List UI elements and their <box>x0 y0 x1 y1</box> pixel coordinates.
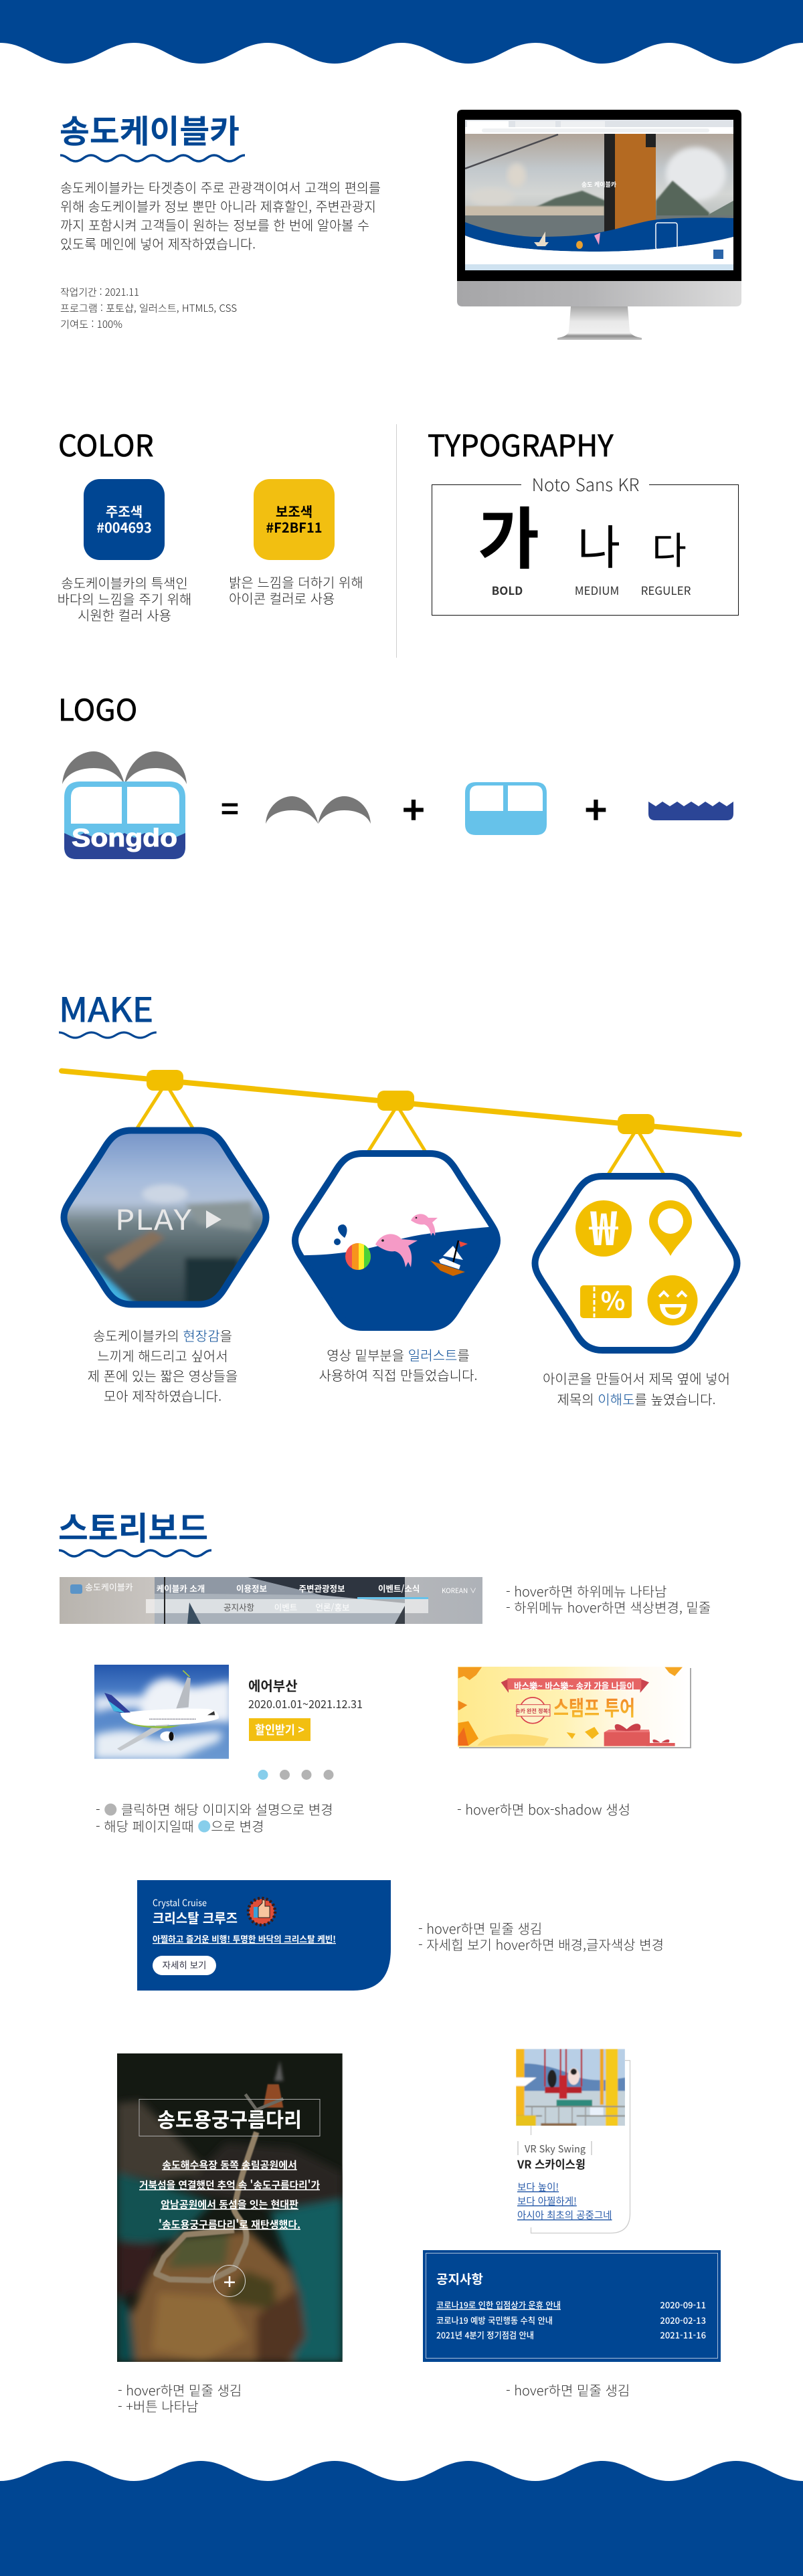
storyboard: VR swing card <box>516 2049 630 2233</box>
storyboard: event slide <box>94 1665 363 1780</box>
note: sky bridge <box>118 2380 242 2415</box>
storyboard: sky bridge card: 암남공원에서 동섬을 잇는 현대판 <box>161 2197 298 2211</box>
panel: typography specimen: REGULER <box>641 581 691 598</box>
storyboard: autumn banner <box>458 1667 691 1748</box>
photo: airplane <box>94 1665 232 1759</box>
monitor mockup: 송도 케이블카 <box>582 180 617 189</box>
logo heading: LOGO <box>58 686 137 729</box>
swatch: secondary: 보조색 <box>276 501 313 521</box>
note: navigation: - 하위메뉴 hover하면 색상변경, 밑줄 <box>506 1597 711 1617</box>
monitor mockup <box>457 110 741 340</box>
icon: sailboat <box>430 1240 468 1276</box>
storyboard: autumn banner: 송카 완전 정복! <box>515 1708 550 1715</box>
storyboard: navigation screenshot: 이벤트/소식 <box>378 1582 420 1594</box>
caption: gondola 2: 영상 밑부분을 일러스트를 <box>327 1345 470 1364</box>
project meta: 작업기간 : 2021.11 <box>60 285 139 299</box>
top wave banner <box>0 0 803 64</box>
storyboard: notice board: 공지사항 <box>436 2270 483 2288</box>
storyboard: sky bridge card: 거북섬을 연결했던 추억 속 '송도구름다리'가 <box>139 2178 320 2192</box>
storyboard: notice board: 2021-11-16 <box>660 2328 706 2341</box>
caption: gondola 3: 아이콘을 만들어서 제목 옆에 넣어 <box>543 1368 730 1388</box>
project meta: 프로그램 : 포토샵, 일러스트, HTML5, CSS <box>60 301 237 315</box>
storyboard: event slide: 에어부산 <box>248 1675 298 1695</box>
swatch: primary <box>84 479 165 560</box>
intro description <box>60 177 381 253</box>
storyboard: navigation screenshot: 주변관광정보 <box>298 1582 345 1594</box>
icon: beach ball <box>345 1243 372 1270</box>
logo: full mark: Songdo <box>72 824 177 852</box>
note: cruise: - hover하면 밑줄 생김 <box>418 1918 542 1938</box>
icon: won coin <box>575 1192 632 1259</box>
logo part: cabin <box>465 782 547 835</box>
storyboard: event slide: 2020.01.01~2021.12.31 <box>248 1695 363 1712</box>
caption: gondola 3 <box>543 1368 730 1408</box>
plus sign: + <box>402 779 425 836</box>
panel: typography specimen: Noto Sans KR <box>532 472 639 496</box>
storyboard: VR swing card: VR 스카이스윙 <box>517 2155 586 2172</box>
caption: gondola 2 <box>319 1345 478 1384</box>
note: slider: - 해당 페이지일때 ●으로 변경 <box>96 1816 264 1835</box>
storyboard: sky bridge card: 송도해수욕장 동쪽 송림공원에서 <box>162 2158 297 2172</box>
panel: typography specimen <box>432 472 739 616</box>
primary colour description: 시원한 컬러 사용 <box>78 605 171 624</box>
intro description: 까지 포함시켜 고객들이 원하는 정보를 한 번에 알아볼 수 <box>60 215 369 234</box>
caption: gondola 1 <box>88 1325 238 1405</box>
storyboard: navigation screenshot: 케이블카 소개 <box>157 1582 205 1594</box>
note: notice board: - hover하면 밑줄 생김 <box>506 2380 630 2399</box>
logo part: wave <box>648 802 733 820</box>
cable line <box>62 1071 739 1135</box>
project meta: 기여도 : 100% <box>60 317 122 331</box>
icon: small dolphin <box>411 1214 438 1236</box>
storyboard: notice board: 코로나19 예방 국민행동 수칙 안내 <box>436 2314 553 2326</box>
caption: gondola 1: 제 폰에 있는 짧은 영상들을 <box>88 1366 238 1385</box>
icon: plus button <box>214 2266 245 2296</box>
storyboard: cruise card: Crystal Cruise <box>153 1896 207 1910</box>
equals sign: = <box>221 786 239 830</box>
color heading: COLOR <box>58 422 154 465</box>
storyboard: navigation screenshot: 송도케이블카 <box>85 1580 133 1593</box>
storyboard: VR swing card: 보다 아찔하게! <box>517 2194 577 2208</box>
icon: location pin <box>649 1200 692 1256</box>
storyboard: notice board: 코로나19로 인한 입점상가 운휴 안내 <box>436 2298 561 2311</box>
primary colour description: 송도케이블카의 특색인 <box>61 573 188 592</box>
panel: gondola 1 video: PLAY <box>116 1204 192 1239</box>
swatch: secondary: #F2BF11 <box>266 517 323 537</box>
storyboard: VR swing card: 보다 높이! <box>517 2180 559 2194</box>
storyboard: sky bridge card: '송도용궁구름다리'로 재탄생했다. <box>159 2217 300 2231</box>
storyboard: navigation screenshot: 공지사항 <box>224 1600 254 1613</box>
storyboard: autumn banner: 바스樂~ 바스樂~ 송카 가을 나들이 <box>514 1679 634 1692</box>
note: sky bridge: - +버튼 나타남 <box>118 2396 199 2415</box>
typography heading: TYPOGRAPHY <box>428 422 614 465</box>
secondary colour description: 아이콘 컬러로 사용 <box>229 588 335 608</box>
secondary colour description: 밝은 느낌을 더하기 위해 <box>229 572 363 591</box>
note: cruise <box>418 1918 664 1954</box>
note: navigation: - hover하면 하위메뉴 나타남 <box>506 1581 666 1600</box>
icon: large dolphin <box>375 1234 418 1267</box>
note: banner: - hover하면 box-shadow 생성 <box>457 1799 630 1819</box>
storyboard: navigation screenshot <box>60 1577 482 1624</box>
note: navigation <box>506 1581 711 1617</box>
panel: typography specimen: 가 <box>478 485 539 582</box>
storyboard heading: 스토리보드 <box>58 1502 208 1549</box>
caption: gondola 3: 제목의 이해도를 높였습니다. <box>557 1389 716 1408</box>
storyboard: notice board: 2021년 4분기 정기점검 안내 <box>436 2328 534 2341</box>
caption: gondola 2: 사용하여 직접 만들었습니다. <box>319 1365 478 1384</box>
icon: water drops <box>334 1224 347 1245</box>
panel: gondola 3 icons <box>535 1114 737 1350</box>
storyboard: navigation screenshot: 이벤트 <box>274 1600 297 1613</box>
caption: gondola 1: 송도케이블카의 현장감을 <box>93 1325 232 1345</box>
storyboard: VR swing card: 아시아 최초의 공중그네 <box>517 2208 612 2222</box>
panel: gondola 1 video <box>60 1070 269 1307</box>
storyboard: sky bridge card: 송도용궁구름다리 <box>157 2104 302 2133</box>
primary colour description: 바다의 느낌을 주기 위해 <box>58 589 191 608</box>
bottom wave banner <box>0 2461 803 2576</box>
logo: full mark <box>62 751 187 859</box>
panel: typography specimen: BOLD <box>492 581 523 598</box>
storyboard: cruise card <box>137 1880 391 1991</box>
storyboard: VR swing card: VR Sky Swing <box>525 2142 586 2156</box>
note: slider: - ● 클릭하면 해당 이미지와 설명으로 변경 <box>96 1799 333 1819</box>
panel: typography specimen: 다 <box>652 521 687 575</box>
icon: smiley <box>648 1275 697 1325</box>
intro description: 송도케이블카는 타겟층이 주로 관광객이여서 고객의 편의를 <box>60 177 381 197</box>
intro description: 위해 송도케이블카 정보 뿐만 아니라 제휴할인, 주변관광지 <box>60 196 376 215</box>
swatch: primary: #004693 <box>96 517 152 537</box>
storyboard: notice board: 2020-02-13 <box>660 2314 706 2326</box>
primary colour description <box>58 573 191 624</box>
icon: discount tag: % <box>601 1281 625 1317</box>
caption: gondola 1: 느끼게 해드리고 싶어서 <box>97 1346 228 1365</box>
slider dots <box>258 1770 333 1780</box>
project meta <box>60 285 237 331</box>
note: slider <box>96 1799 333 1835</box>
secondary colour description <box>229 572 363 608</box>
storyboard: notice board: 2020-09-11 <box>660 2298 706 2311</box>
intro description: 있도록 메인에 넣어 제작하였습니다. <box>60 234 256 253</box>
swatch: secondary <box>254 479 335 560</box>
storyboard: cruise card: 자세히 보기 <box>163 1958 206 1971</box>
panel: typography specimen: MEDIUM <box>575 581 619 598</box>
storyboard: cruise card: 크리스탈 크루즈 <box>153 1908 238 1927</box>
storyboard: sky bridge card <box>117 2053 343 2362</box>
icon: thumbs up badge <box>248 1898 275 1925</box>
plus sign: + <box>584 779 608 836</box>
note: sky bridge: - hover하면 밑줄 생김 <box>118 2380 242 2399</box>
swatch: primary: 주조색 <box>106 501 143 521</box>
storyboard: autumn banner: 스탬프 투어 <box>553 1691 635 1722</box>
caption: gondola 1: 모아 제작하였습니다. <box>104 1386 221 1405</box>
icon: discount tag <box>580 1281 632 1318</box>
photo: swing <box>516 2049 625 2126</box>
logo part: gull arches <box>266 796 371 824</box>
note: cruise: - 자세힙 보기 hover하면 배경,글자색상 변경 <box>418 1934 664 1954</box>
storyboard: cruise card: 아찔하고 즐거운 비행! 투명한 바닥의 크리스탈 케빈! <box>153 1932 336 1945</box>
panel: gondola 2 illustration <box>289 1091 503 1334</box>
intro heading: 송도케이블카 <box>60 105 240 152</box>
storyboard: notice board <box>423 2250 721 2362</box>
icon: won coin: ₩ <box>588 1192 618 1259</box>
storyboard: event slide: 할인받기 > <box>255 1721 304 1738</box>
panel: typography specimen: 나 <box>577 511 620 578</box>
storyboard: navigation screenshot: KOREAN ∨ <box>442 1585 476 1595</box>
storyboard: navigation screenshot: 이용정보 <box>236 1582 267 1594</box>
make heading: MAKE <box>59 984 153 1032</box>
storyboard: navigation screenshot: 언론/홍보 <box>316 1600 349 1613</box>
